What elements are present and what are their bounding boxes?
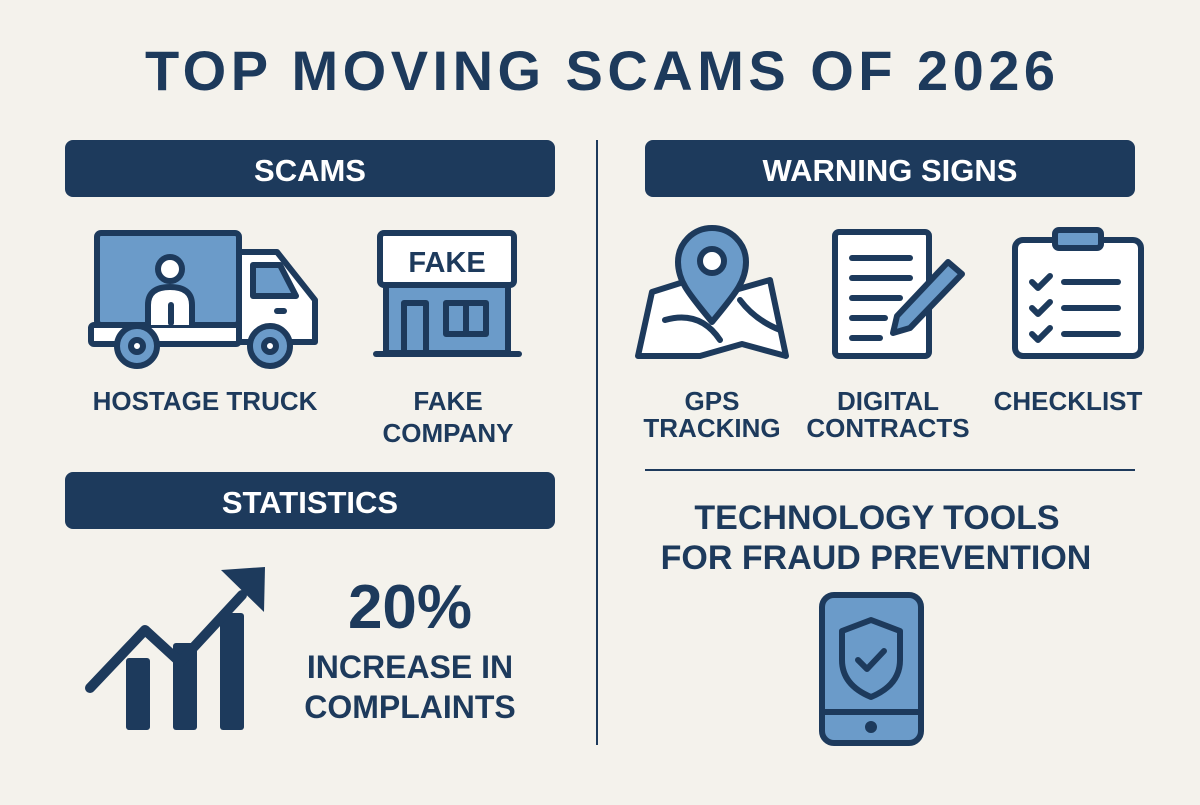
icon: gps map: [638, 228, 786, 356]
icon: fake storefront: FAKE: [408, 247, 486, 279]
header: statistics: STATISTICS: [222, 485, 398, 520]
stat text: INCREASE IN: [307, 649, 513, 685]
stat: 20%: 20%: [348, 573, 472, 642]
header: statistics: [65, 472, 555, 529]
labels: warning signs: DIGITAL: [837, 386, 939, 416]
icon: fake storefront: [376, 233, 519, 354]
labels: warning signs: CHECKLIST: [994, 386, 1143, 416]
header: scams: [65, 140, 555, 197]
icon: digital contract: [835, 232, 962, 356]
labels: warning signs: CONTRACTS: [806, 413, 970, 443]
chart: rising bars: [90, 567, 265, 730]
labels: warning signs: TRACKING: [643, 413, 781, 443]
labels: warning signs: [643, 386, 1143, 443]
header: warning signs: WARNING SIGNS: [763, 153, 1017, 188]
header: scams: SCAMS: [254, 153, 366, 188]
title: TOP MOVING SCAMS OF 2026: [145, 39, 1055, 102]
icon: checklist: [1015, 230, 1141, 356]
stat text: COMPLAINTS: [304, 689, 516, 725]
label: fake company: FAKE: [413, 386, 483, 416]
heading: technology tools: FOR FRAUD PREVENTION: [661, 539, 1091, 577]
label: fake company: COMPANY: [383, 418, 513, 448]
icon: phone shield: [822, 595, 921, 743]
heading: technology tools: TECHNOLOGY TOOLS: [694, 499, 1060, 537]
labels: warning signs: GPS: [685, 386, 739, 416]
header: warning signs: [645, 140, 1135, 197]
icon: hostage truck: [91, 233, 315, 366]
label: hostage truck: HOSTAGE TRUCK: [93, 386, 318, 416]
